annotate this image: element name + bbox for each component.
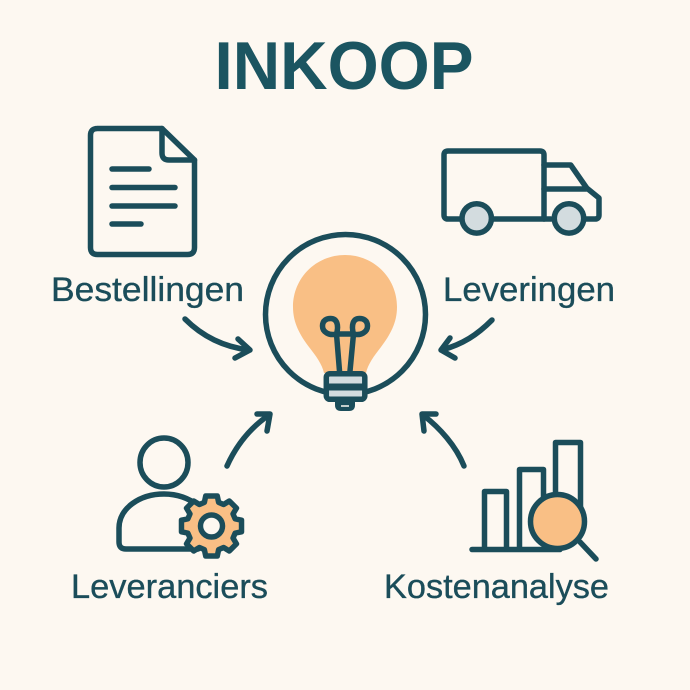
- outer circle: [266, 234, 426, 394]
- screw base: [326, 374, 365, 399]
- bars: [472, 442, 580, 550]
- title: INKOOP: [214, 28, 474, 104]
- magnifier: [530, 494, 596, 559]
- label: Kostenanalyse: Kostenanalyse: [384, 568, 609, 606]
- arrow: Leveranciers to centre: [227, 414, 270, 466]
- label: Leveranciers: Leveranciers: [71, 568, 268, 606]
- icon: light bulb in circle: [266, 234, 426, 411]
- filament: [322, 318, 368, 371]
- arrow: Leveringen to centre: [441, 320, 492, 358]
- icon: bar chart with magnifier: [472, 442, 596, 559]
- arrow: Kostenanalyse to centre: [422, 414, 464, 466]
- bulb glass: [293, 255, 397, 373]
- icon: truck: [444, 151, 599, 233]
- arrow: Bestellingen to centre: [185, 319, 250, 358]
- label: Bestellingen: Bestellingen: [51, 271, 244, 309]
- person: [119, 438, 199, 549]
- icon: document: [90, 128, 194, 254]
- gear: [181, 496, 242, 556]
- label: Leveringen: Leveringen: [443, 271, 615, 309]
- icon: supplier with gear: [119, 438, 242, 556]
